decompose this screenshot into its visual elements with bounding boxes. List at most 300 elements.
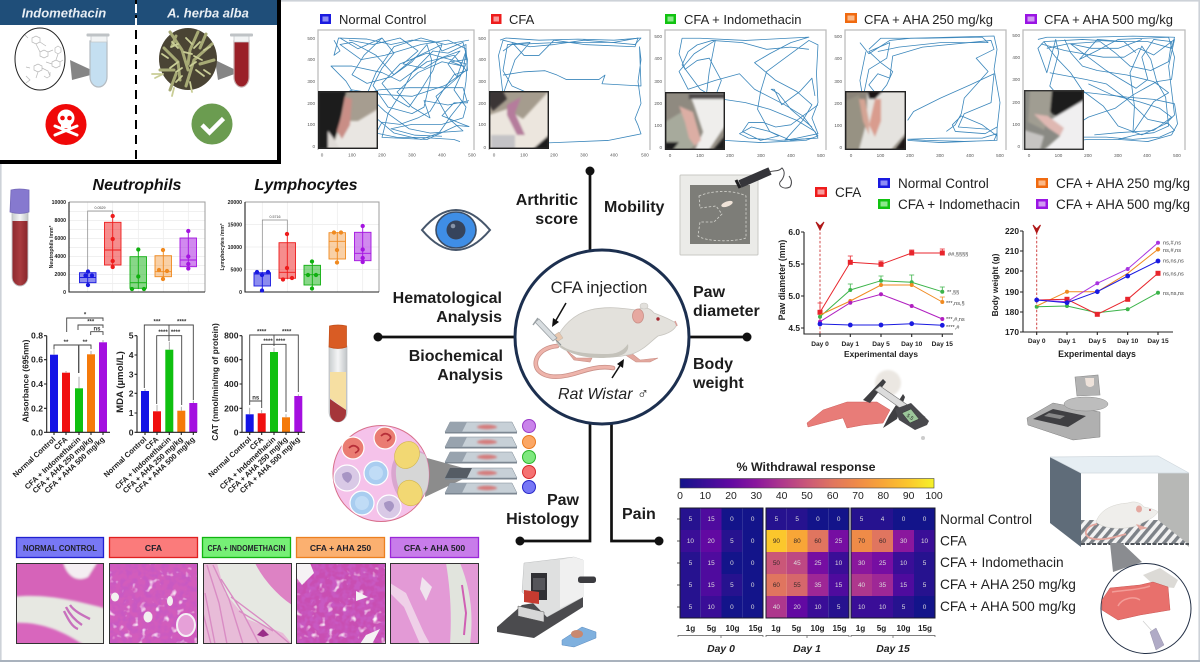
chart: lymphocytes box plot: 0 bbox=[239, 290, 242, 296]
column labels: 1g bbox=[686, 624, 695, 633]
heat panel: Day 15: 10 bbox=[879, 604, 886, 611]
column labels bbox=[686, 624, 932, 633]
heat panel: Day 0: 15 bbox=[708, 582, 715, 589]
row labels: CFA + Indomethacin bbox=[940, 555, 1064, 570]
chart: paw diameter line: 5.5 bbox=[788, 259, 800, 269]
column labels: 15g bbox=[918, 624, 932, 633]
chart: body weight line: ns,#,ns bbox=[1163, 248, 1181, 254]
slide group dots bbox=[522, 420, 536, 494]
heat panel: Day 1: 10 bbox=[814, 604, 822, 611]
heat panel: Day 0: 15 bbox=[708, 560, 715, 567]
plot: mobility Normal Control: 300 bbox=[307, 79, 315, 84]
label: Body weight: weight bbox=[692, 375, 744, 392]
chart: lymphocytes box plot: 10000 bbox=[228, 245, 242, 251]
heat panel: Day 1: 5 bbox=[775, 516, 779, 523]
label: Paw diameter: diameter bbox=[693, 303, 760, 320]
divider bbox=[135, 0, 137, 160]
chart: CAT bars: Normal Control bbox=[206, 435, 253, 479]
chart: CAT bars: CAT (nmol/min/mg of protein) bbox=[210, 323, 220, 441]
chart: CAT bars: CFA + AHA 250 mg/kg bbox=[226, 435, 290, 495]
plot: mobility CFA + Indomethacin: 0 bbox=[659, 145, 662, 150]
heat panel: Day 15: 0 bbox=[923, 604, 927, 611]
heat panel: Day 0: 5 bbox=[689, 560, 693, 567]
chart: paw diameter line: Paw diameter (mm) bbox=[777, 240, 787, 320]
box: AHA 500 bbox=[180, 229, 196, 270]
heat panel: Day 1: 45 bbox=[794, 560, 801, 567]
heat panel: Day 0 bbox=[680, 508, 763, 618]
heat panel: Day 1: 25 bbox=[814, 560, 822, 567]
legend: line chart groups: CFA + AHA 250 mg/kg bbox=[1056, 176, 1190, 191]
heat panel: Day 0: 0 bbox=[751, 538, 755, 545]
microscope slides bbox=[445, 422, 517, 494]
plot: mobility Normal Control: 500 bbox=[307, 36, 315, 41]
chart: absorbance bars: 0.2 bbox=[31, 403, 43, 413]
plot: mobility CFA + AHA 250: 500 bbox=[834, 34, 842, 39]
heat panel: Day 15: 5 bbox=[923, 582, 927, 589]
heat panel: Day 0: 5 bbox=[689, 604, 693, 611]
plot: mobility CFA + Indomethacin: 100 bbox=[654, 123, 662, 128]
series: AHA 500 bbox=[1037, 241, 1160, 302]
label: CFA + AHA 500 bbox=[390, 538, 478, 558]
box: normal bbox=[80, 270, 96, 287]
heat panel: Day 0: 0 bbox=[730, 604, 734, 611]
heat panel: Day 1: 80 bbox=[794, 538, 801, 545]
plot: mobility CFA + AHA 250: 300 bbox=[834, 79, 842, 84]
label: Hematological Analysis: Hematological bbox=[393, 290, 502, 307]
plot: mobility CFA + AHA 500: 0 bbox=[1017, 144, 1020, 149]
chart: body weight line: Day 1 bbox=[1058, 338, 1076, 345]
legend: mobility groups: CFA + AHA 250 mg/kg bbox=[864, 12, 993, 27]
chart: neutrophils box plot: 4000 bbox=[54, 254, 66, 260]
chart: neutrophils box plot: 8000 bbox=[54, 218, 66, 224]
column labels: 15g bbox=[832, 624, 847, 633]
heat panel: Day 0: 5 bbox=[730, 582, 734, 589]
chart: paw diameter line: ##,§§§§ bbox=[948, 252, 968, 258]
colour bar: 70 bbox=[852, 491, 864, 502]
chart: MDA bars: MDA (µmol/L) bbox=[115, 351, 126, 413]
column labels: 10g bbox=[896, 624, 911, 633]
heat panel: Day 1: 60 bbox=[814, 538, 822, 545]
legend: mobility groups bbox=[320, 12, 1173, 27]
label: Biochemical Analysis: Biochemical bbox=[409, 348, 503, 365]
chart: CAT bars: CFA bbox=[248, 435, 265, 452]
chart: MDA bars: **** bbox=[171, 330, 181, 336]
colour bar: 80 bbox=[878, 491, 889, 502]
chart: body weight line: Day 0 bbox=[1028, 338, 1046, 345]
heat panel: Day 0: 15 bbox=[708, 516, 715, 523]
label: Arthritic score: score bbox=[535, 211, 578, 228]
box: AHA 500 bbox=[354, 224, 371, 264]
plot: mobility CFA + AHA 500: 400 bbox=[1143, 153, 1151, 158]
chart: CAT bars: 0 bbox=[234, 427, 239, 437]
chart: CAT bars: ns bbox=[252, 396, 260, 402]
chart: absorbance bars: ** bbox=[64, 340, 69, 346]
chart: paw diameter line: ****,# bbox=[946, 325, 960, 331]
chart: CAT bars: **** bbox=[257, 330, 267, 336]
heat panel: Day 15: 0 bbox=[923, 516, 927, 523]
chart: neutrophils box plot: 0.0529 bbox=[94, 206, 106, 210]
plot: mobility CFA bbox=[478, 30, 650, 158]
heat panel: Day 1: 5 bbox=[837, 604, 841, 611]
plot: mobility Normal Control: 200 bbox=[307, 101, 315, 106]
plot: mobility CFA + AHA 250 bbox=[834, 30, 1006, 158]
chart: paw diameter line: Day 0 bbox=[811, 341, 829, 348]
label: CFA bbox=[110, 538, 198, 558]
molecule lens bbox=[15, 28, 98, 90]
legend: mobility groups: CFA + AHA 500 mg/kg bbox=[1044, 12, 1173, 27]
heat panel: Day 1: 15 bbox=[835, 582, 843, 589]
chart: MDA bars: CFA + Indomethacin bbox=[113, 435, 173, 491]
chart: lymphocytes box plot: 5000 bbox=[230, 268, 242, 274]
heat panel: Day 1: 10 bbox=[835, 560, 843, 567]
heat panel: Day 1: 40 bbox=[773, 604, 780, 611]
series: CFA bbox=[1037, 271, 1160, 316]
column labels: 5g bbox=[877, 624, 886, 633]
box: normal bbox=[254, 270, 270, 292]
heat panel: Day 1: 55 bbox=[794, 582, 801, 589]
row labels: CFA + AHA 250 mg/kg bbox=[940, 577, 1076, 592]
heat panel: Day 15: 5 bbox=[902, 604, 906, 611]
chart: paw diameter line: Day 1 bbox=[841, 341, 859, 348]
legend: line chart groups bbox=[815, 176, 1190, 212]
plot: mobility CFA + Indomethacin: 200 bbox=[654, 101, 662, 106]
legend: mobility groups: Normal Control bbox=[339, 12, 427, 27]
heading: A. herba alba: A. herba alba bbox=[166, 6, 249, 20]
plot: mobility CFA + Indomethacin: 400 bbox=[787, 153, 795, 158]
panel: histology micrographs bbox=[12, 538, 479, 648]
chart: absorbance bars: CFA bbox=[52, 435, 70, 452]
chart: MDA bars: CFA + AHA 500 mg/kg bbox=[133, 435, 197, 495]
icon: skull danger bbox=[46, 104, 86, 145]
chart: absorbance bars: CFA + AHA 250 mg/kg bbox=[31, 435, 95, 495]
row labels bbox=[940, 512, 1076, 614]
herb lens bbox=[152, 28, 240, 96]
chart: MDA bars: CFA bbox=[143, 435, 161, 452]
chart: paw diameter line: Day 10 bbox=[901, 341, 923, 348]
plot: mobility CFA + Indomethacin: 400 bbox=[654, 56, 662, 61]
column labels: 10g bbox=[725, 624, 740, 633]
plot: mobility CFA + AHA 250: 100 bbox=[877, 153, 885, 158]
day labels: Day 0 bbox=[707, 644, 735, 655]
icon: syringe bbox=[533, 318, 561, 345]
icon: mobility arena and camera bbox=[680, 168, 791, 255]
colour bar: 60 bbox=[827, 491, 839, 502]
chart: paw diameter line: 5.0 bbox=[788, 291, 800, 301]
colour bar: 0 bbox=[677, 491, 683, 502]
icon: paw with caliper: 5.5 bbox=[905, 413, 914, 422]
arrow: rat bbox=[612, 359, 624, 378]
chart: paw diameter line: **,§§ bbox=[947, 290, 959, 296]
connector lines bbox=[374, 166, 752, 546]
plot: mobility CFA: 300 bbox=[478, 79, 486, 84]
chart: absorbance bars: 0.6 bbox=[31, 355, 43, 365]
plot: mobility CFA + AHA 500: 100 bbox=[1055, 153, 1063, 158]
chart: paw diameter line bbox=[777, 222, 968, 359]
chart: CAT bars: **** bbox=[263, 339, 273, 345]
icon: balance bbox=[1027, 375, 1108, 440]
plot: mobility CFA + AHA 250: 200 bbox=[834, 101, 842, 106]
icon: blood tube bbox=[10, 189, 29, 286]
plot: mobility CFA + AHA 500 bbox=[1012, 30, 1185, 158]
heat panel: Day 15: 30 bbox=[858, 560, 865, 567]
chart: CAT bars: CFA + Indomethacin bbox=[218, 435, 278, 491]
chart: paw diameter line: Day 5 bbox=[872, 341, 890, 348]
plot: mobility CFA + Indomethacin: 200 bbox=[726, 153, 734, 158]
chart: absorbance bars bbox=[11, 312, 110, 495]
series: CFA bbox=[818, 249, 945, 314]
chart: MDA bars: **** bbox=[158, 330, 168, 336]
chart: body weight line: 180 bbox=[1005, 307, 1019, 317]
chart: paw diameter line: 4.5 bbox=[788, 323, 800, 333]
chart: body weight line: ns,ns,ns bbox=[1163, 272, 1184, 278]
box: CFA bbox=[104, 214, 121, 269]
chart: neutrophils box plot: 6000 bbox=[54, 236, 66, 242]
heading: Indomethacin: Indomethacin bbox=[22, 6, 106, 20]
chart: MDA bars: *** bbox=[153, 320, 161, 326]
row labels: CFA + AHA 500 mg/kg bbox=[940, 599, 1076, 614]
plot: mobility CFA: 200 bbox=[550, 152, 558, 158]
photo: paw normal bbox=[318, 91, 378, 149]
column labels: 1g bbox=[856, 624, 865, 633]
heading: % Withdrawal response bbox=[737, 460, 876, 474]
plot: mobility CFA: 500 bbox=[478, 36, 486, 41]
icon: centrifuged tube bbox=[329, 325, 347, 422]
colour bar: 20 bbox=[725, 491, 737, 502]
label: Mobility: Mobility bbox=[604, 199, 665, 216]
heat panel: Day 15: 40 bbox=[858, 582, 865, 589]
label: Hematological Analysis: Analysis bbox=[436, 309, 502, 326]
label: Paw Histology: Histology bbox=[506, 511, 579, 528]
chart: body weight line: 190 bbox=[1005, 287, 1019, 297]
plot: mobility CFA + AHA 500: 300 bbox=[1012, 77, 1020, 82]
heat panel: Day 0: 0 bbox=[730, 516, 734, 523]
plot: mobility CFA: 100 bbox=[520, 152, 528, 158]
series: AHA 250 bbox=[1037, 248, 1160, 306]
chart: neutrophils box plot: 0 bbox=[63, 290, 66, 296]
plot: mobility CFA + AHA 500: 200 bbox=[1084, 153, 1092, 158]
plot: mobility CFA + AHA 500: 100 bbox=[1012, 122, 1020, 127]
heat panel: Day 15: 70 bbox=[858, 538, 865, 545]
icon: indomethacin tube bbox=[86, 34, 110, 87]
icon: herb extract tube bbox=[230, 34, 253, 87]
heat panel: Day 1: 0 bbox=[837, 516, 841, 523]
heat panel: Day 1: 5 bbox=[795, 516, 799, 523]
chart: body weight line: 200 bbox=[1005, 266, 1019, 276]
chart: CAT bars: 600 bbox=[224, 355, 239, 365]
plot: mobility Normal Control: 300 bbox=[408, 152, 416, 158]
heat panel: Day 15: 10 bbox=[900, 560, 907, 567]
plot: mobility Normal Control: 0 bbox=[321, 152, 324, 158]
rat illustration bbox=[536, 303, 677, 377]
heat panel: Day 15: 0 bbox=[902, 516, 906, 523]
chart: body weight line: Experimental days bbox=[1058, 349, 1136, 359]
text: CFA injection: CFA injection bbox=[551, 278, 647, 297]
plot: mobility Normal Control: 100 bbox=[307, 122, 315, 127]
heat panel: Day 0: 5 bbox=[730, 538, 734, 545]
chart: absorbance bars: ns bbox=[93, 326, 101, 332]
micrograph: AHA 250 bbox=[296, 563, 386, 644]
plot: mobility CFA + Indomethacin: 0 bbox=[669, 153, 672, 158]
series: indomethacin bbox=[1035, 291, 1160, 313]
heat panel: Day 0: 0 bbox=[751, 604, 755, 611]
row labels: Normal Control bbox=[940, 512, 1032, 527]
micrograph: indomethacin bbox=[203, 563, 292, 644]
series: normal bbox=[818, 322, 944, 327]
chart: MDA bars: 3 bbox=[129, 369, 134, 379]
chart: absorbance bars: CFA + Indomethacin bbox=[23, 435, 83, 491]
legend: mobility groups: CFA + Indomethacin bbox=[684, 12, 801, 27]
label: CFA + AHA 500: CFA + AHA 500 bbox=[404, 543, 465, 553]
chart: CAT bars: **** bbox=[282, 330, 292, 336]
series: indomethacin bbox=[818, 275, 945, 318]
chart: body weight line: 170 bbox=[1005, 327, 1019, 337]
label: CFA + INDOMETHACIN bbox=[202, 538, 290, 558]
chart: body weight line: Body weight (g) bbox=[990, 253, 1000, 316]
box: indomethacin bbox=[130, 248, 146, 291]
series: AHA 250 bbox=[820, 284, 945, 315]
colour bar: 40 bbox=[776, 491, 788, 502]
chart: absorbance bars: 0.4 bbox=[31, 379, 43, 389]
heat panel: Day 0: 20 bbox=[708, 538, 715, 545]
heat panel: Day 1: 0 bbox=[816, 516, 820, 523]
heat panel: Day 15: 60 bbox=[879, 538, 886, 545]
chart: absorbance bars: *** bbox=[87, 320, 95, 326]
column labels: 1g bbox=[771, 624, 781, 633]
heat panel: Day 15: 30 bbox=[900, 538, 907, 545]
plot: mobility CFA + Indomethacin: 100 bbox=[696, 153, 704, 158]
chart: lymphocytes box plot: Lymphocytes /mm³ bbox=[220, 223, 226, 271]
row labels: CFA bbox=[940, 534, 967, 548]
header bar bbox=[0, 0, 277, 25]
chart: paw diameter line: ***,ns,§ bbox=[946, 301, 965, 307]
icon: microtome bbox=[497, 557, 596, 647]
label: Body weight: Body bbox=[693, 356, 733, 373]
photo: paw indomethacin bbox=[665, 92, 725, 150]
label: CFA: CFA bbox=[145, 543, 162, 553]
center circle: CFA injection rat bbox=[515, 250, 689, 424]
label: Pain: Pain bbox=[622, 506, 656, 523]
chart: body weight line bbox=[990, 225, 1184, 359]
panel: treatment comparison bbox=[0, 0, 281, 164]
chart: absorbance bars: CFA + AHA 500 mg/kg bbox=[43, 435, 107, 495]
label: NORMAL CONTROL bbox=[16, 538, 104, 558]
colour bar: 100 bbox=[925, 491, 943, 502]
colour bar: 50 bbox=[801, 491, 813, 502]
heat panel: Day 15: 25 bbox=[879, 560, 886, 567]
chart: CAT bars: 800 bbox=[224, 331, 239, 341]
chart: absorbance bars: 0.0 bbox=[31, 427, 43, 437]
plot: mobility CFA + AHA 250: 300 bbox=[936, 153, 944, 158]
series: normal bbox=[1035, 259, 1160, 305]
inset: injected paw bbox=[1101, 564, 1191, 654]
chart: paw diameter line: 6.0 bbox=[788, 227, 800, 237]
chart: CAT bars: 400 bbox=[224, 379, 239, 389]
plot: mobility CFA: 400 bbox=[478, 57, 486, 62]
column labels: 10g bbox=[810, 624, 825, 633]
chart: MDA bars: 1 bbox=[129, 408, 134, 418]
heat panel: Day 1: 90 bbox=[773, 538, 780, 545]
chart: body weight line: Day 10 bbox=[1117, 338, 1139, 345]
plot: mobility CFA + AHA 500: 500 bbox=[1012, 33, 1020, 38]
heat panel: Day 0: 0 bbox=[751, 582, 755, 589]
plot: mobility Normal Control: 200 bbox=[378, 152, 386, 158]
colour bar bbox=[677, 478, 943, 502]
plot: mobility CFA: 100 bbox=[478, 122, 486, 127]
heat panel: Day 15 bbox=[851, 508, 935, 618]
box: AHA 250 bbox=[329, 231, 346, 264]
chart: MDA bars: CFA + AHA 250 mg/kg bbox=[121, 435, 185, 495]
heat panel: Day 1: 60 bbox=[773, 582, 780, 589]
chart: MDA bars: 0 bbox=[129, 427, 134, 437]
plot: mobility CFA + AHA 500: 0 bbox=[1028, 153, 1031, 158]
heat panel: Day 15: 5 bbox=[923, 560, 927, 567]
heat panel: Day 15: 10 bbox=[858, 604, 865, 611]
heat panel: Day 1: 35 bbox=[814, 582, 822, 589]
plot: mobility CFA + AHA 250: 0 bbox=[839, 145, 842, 150]
plot: mobility CFA + AHA 250: 500 bbox=[996, 153, 1004, 158]
chart: body weight line: Day 5 bbox=[1088, 338, 1106, 345]
chart: MDA bars: 4 bbox=[129, 350, 134, 360]
plot: mobility CFA + Indomethacin: 500 bbox=[817, 153, 825, 158]
cone to paw inset bbox=[1110, 543, 1142, 572]
chart: body weight line: Day 15 bbox=[1147, 338, 1169, 345]
chart: neutrophils box plot: 10000 bbox=[52, 200, 66, 206]
micrograph: AHA 500 bbox=[390, 563, 479, 644]
chart: neutrophils box plot: Neutrophils /mm³ bbox=[49, 225, 55, 268]
plot: mobility CFA + AHA 250: 200 bbox=[906, 153, 914, 158]
icon: eye bbox=[422, 210, 490, 250]
chart: absorbance bars: ** bbox=[83, 340, 88, 346]
plot: mobility CFA + AHA 250: 0 bbox=[850, 153, 853, 158]
heat panel: Day 0: 10 bbox=[687, 538, 694, 545]
chart: neutrophils box plot: 2000 bbox=[54, 272, 66, 278]
plot: mobility CFA: 0 bbox=[483, 145, 486, 150]
plot: mobility Normal Control: 0 bbox=[312, 144, 315, 149]
heat panel: Day 1 bbox=[766, 508, 849, 618]
plot: mobility CFA + AHA 250: 100 bbox=[834, 123, 842, 128]
heat panel: Day 0: 5 bbox=[689, 516, 693, 523]
chart: body weight line: 220 bbox=[1005, 226, 1019, 236]
legend: line chart groups: Normal Control bbox=[898, 176, 989, 191]
day labels: Day 1 bbox=[793, 644, 821, 655]
label: NORMAL CONTROL: NORMAL CONTROL bbox=[23, 543, 97, 553]
chart: absorbance bars: Normal Control bbox=[11, 435, 57, 479]
heat panel: Day 0: 0 bbox=[730, 560, 734, 567]
chart: neutrophils box plot bbox=[49, 200, 205, 296]
heat panel: Day 0: 0 bbox=[751, 560, 755, 567]
heat panel: Day 0: 10 bbox=[708, 604, 715, 611]
plot: mobility CFA + AHA 500: 300 bbox=[1114, 153, 1122, 158]
tissue cells lens bbox=[333, 426, 478, 522]
column labels: 15g bbox=[748, 624, 763, 633]
plot: mobility CFA + Indomethacin: 300 bbox=[757, 153, 765, 158]
icon: paw with caliper bbox=[807, 370, 929, 440]
chart: body weight line: ns,#,ns bbox=[1163, 240, 1181, 246]
label: CFA + INDOMETHACIN: CFA + INDOMETHACIN bbox=[208, 543, 286, 553]
plot: mobility CFA + AHA 500: 200 bbox=[1012, 100, 1020, 105]
chart: absorbance bars: * bbox=[84, 312, 87, 318]
label: Arthritic score: Arthritic bbox=[516, 192, 578, 209]
heading: Neutrophils: Neutrophils bbox=[93, 177, 182, 194]
plot: mobility CFA + Indomethacin: 500 bbox=[654, 34, 662, 39]
heat panel: Day 15: 15 bbox=[900, 582, 907, 589]
plot: mobility CFA: 0 bbox=[493, 152, 496, 158]
chart: lymphocytes box plot: 0.5716 bbox=[270, 215, 280, 219]
plot: mobility CFA + AHA 500: 400 bbox=[1012, 55, 1020, 60]
chart: body weight line: ns,ns,ns bbox=[1163, 291, 1184, 297]
plot: mobility CFA: 400 bbox=[610, 152, 618, 158]
micrograph: CFA bbox=[109, 563, 198, 644]
